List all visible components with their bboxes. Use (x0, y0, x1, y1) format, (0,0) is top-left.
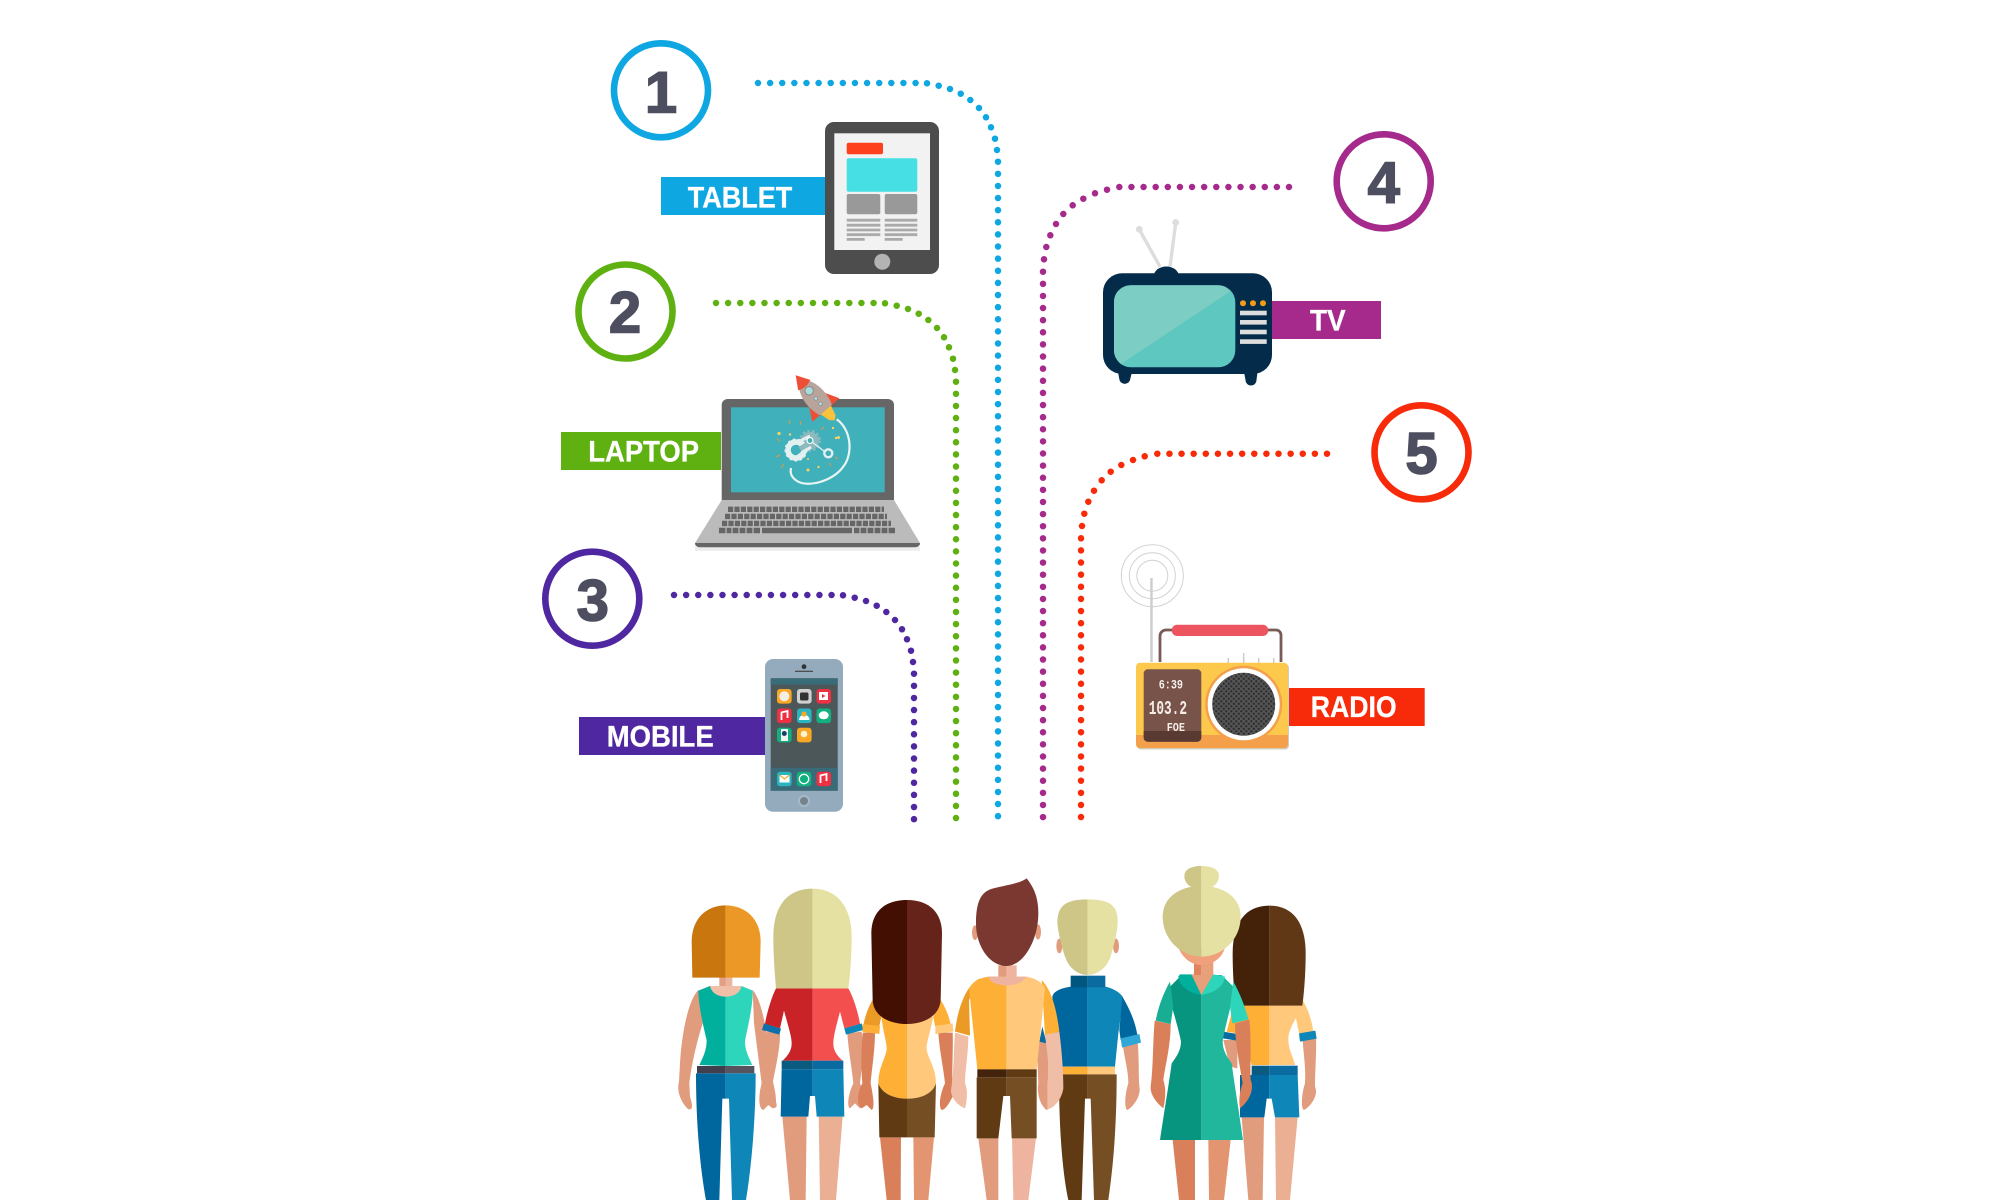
laptop label: LAPTOP (588, 436, 699, 468)
graphic: gears and orbit on laptop screen (776, 419, 850, 484)
icon: mobile phone (765, 659, 843, 812)
icon: radio: 103.2 (1149, 698, 1187, 720)
tablet label (661, 177, 825, 215)
dotted connector 4 (1043, 187, 1289, 818)
dotted connector 1 (758, 83, 998, 816)
radio label (1288, 688, 1425, 726)
person 5: blonde short hair, blue shirt (1037, 899, 1141, 1200)
person 4: brown quiff, yellow t-shirt (951, 878, 1063, 1200)
figures: last four (951, 866, 1317, 1200)
step 4: number circle (1337, 134, 1431, 228)
step 4: number circle: 4 (1368, 150, 1400, 216)
person 7: long brown hair, blue shorts (1223, 906, 1317, 1200)
mobile label (579, 717, 765, 755)
person 6: blonde bun, green dress (1151, 866, 1252, 1200)
dotted connector 5 (1081, 454, 1327, 818)
tv label: TV (1310, 304, 1346, 338)
dotted connector 2 (716, 303, 956, 818)
icon: tablet (825, 122, 939, 274)
tv label (1272, 301, 1381, 339)
mobile label: MOBILE (607, 720, 714, 754)
person 3: long dark hair, yellow top (858, 900, 953, 1200)
icon: radio: FOE (1167, 721, 1185, 735)
person 2: long blonde hair, red top (759, 889, 863, 1200)
laptop label (561, 432, 721, 470)
tablet label: TABLET (688, 182, 792, 214)
step 1: number circle: 1 (645, 60, 677, 125)
icon: television (1103, 219, 1272, 386)
icon: laptop (695, 363, 920, 551)
icon: radio: 6:39 (1159, 678, 1183, 693)
step 1: number circle (614, 43, 708, 137)
step 2: number circle (578, 264, 672, 358)
step 5: number circle (1374, 405, 1468, 499)
figures: first three (678, 889, 953, 1200)
step 3: number circle (545, 552, 639, 646)
icon: radio (1121, 545, 1289, 750)
step 3: number circle: 3 (577, 568, 609, 633)
people group (678, 866, 1317, 1200)
step 5: number circle: 5 (1405, 422, 1438, 486)
step 2: number circle: 2 (609, 281, 641, 346)
dotted connector 3 (674, 595, 914, 820)
person 1: orange bob hair, teal top (678, 905, 776, 1200)
graphic: rocket (782, 363, 848, 432)
radio label: RADIO (1311, 691, 1397, 724)
